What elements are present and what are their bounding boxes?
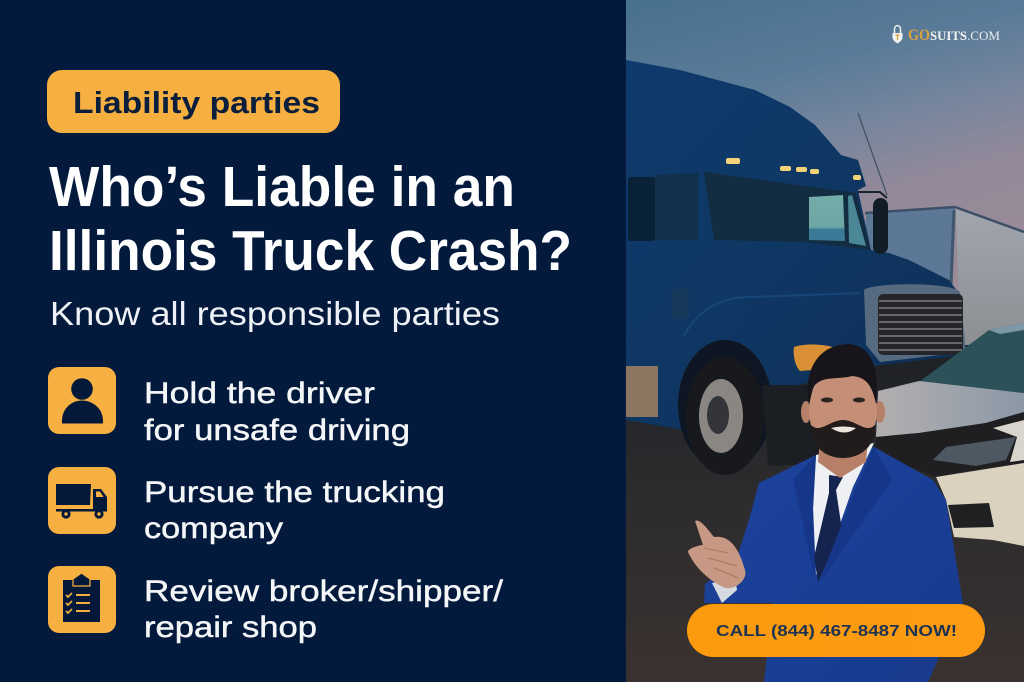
list item: driver: Hold the driver <box>144 377 375 410</box>
title: Who’s Liable in an <box>49 155 515 219</box>
list item: broker, shipper, repair shop: repair shop <box>144 611 317 644</box>
car <box>876 323 1024 546</box>
call to action pill <box>687 604 985 657</box>
logo: GoSuits.com <box>892 26 1000 44</box>
beard <box>811 420 875 458</box>
pointing hand <box>688 521 745 588</box>
subtitle: Know all responsible parties <box>50 295 500 332</box>
badge: Liability parties <box>47 70 340 133</box>
trailer <box>865 207 1024 345</box>
fog light vent <box>948 503 994 528</box>
side window <box>654 173 698 240</box>
left navy panel <box>0 0 626 682</box>
dark grille band <box>876 412 1024 477</box>
frame under cab <box>762 385 850 466</box>
side mirror <box>628 177 655 241</box>
headlight <box>794 344 836 371</box>
right mirror <box>873 198 888 254</box>
marker lights <box>726 158 861 180</box>
white wedge <box>993 420 1024 462</box>
face <box>809 365 877 455</box>
badge: Liability parties: Liability parties <box>73 85 320 120</box>
list item: trucking company: Pursue the trucking <box>144 476 445 509</box>
shirt <box>813 443 874 575</box>
icon: truck <box>48 467 116 534</box>
bumper <box>936 463 1024 546</box>
wheel <box>686 357 764 475</box>
eyes <box>821 398 833 402</box>
neck <box>818 440 868 478</box>
list item: trucking company: company <box>144 512 283 545</box>
cab body <box>626 60 966 430</box>
lapels <box>793 447 892 585</box>
ears <box>801 401 811 423</box>
list item: driver <box>48 367 410 447</box>
logo: GoSuits.com: .COM <box>967 29 1000 43</box>
icon: clipboard checklist <box>48 566 116 633</box>
icon: person <box>48 367 116 434</box>
list item: trucking company <box>48 467 445 545</box>
fender line <box>683 293 860 337</box>
list item: driver: for unsafe driving <box>144 414 410 447</box>
logo: GoSuits.com: GO <box>908 27 930 44</box>
lawyer figure <box>688 344 963 682</box>
headlight <box>933 437 1016 466</box>
scene: truck crash photo <box>626 0 1024 682</box>
list item: broker, shipper, repair shop: Review broker/shipper/ <box>144 575 504 608</box>
truck <box>626 60 966 475</box>
grille <box>878 294 963 355</box>
title: Illinois Truck Crash? <box>49 219 572 283</box>
hair <box>808 344 877 405</box>
windshield <box>704 172 871 250</box>
side door panel <box>672 289 689 319</box>
title <box>49 155 572 283</box>
antenna <box>858 113 887 195</box>
icon: padlock <box>892 26 902 44</box>
wheel arch <box>678 340 772 470</box>
logo: GoSuits.com: SUITS <box>930 29 967 43</box>
smile <box>831 426 856 432</box>
tan step panel <box>626 366 658 417</box>
list item: broker, shipper, repair shop <box>48 566 504 644</box>
hood <box>876 381 1024 437</box>
windshield reflection <box>809 195 845 241</box>
windshield <box>919 323 1024 393</box>
call to action pill: CALL (844) 467-8487 NOW! <box>716 623 957 640</box>
suit <box>704 447 963 682</box>
ground <box>626 345 1024 682</box>
sky <box>626 0 1024 350</box>
grille surround <box>864 284 966 362</box>
tie <box>814 475 843 582</box>
shirt cuff <box>712 577 737 603</box>
